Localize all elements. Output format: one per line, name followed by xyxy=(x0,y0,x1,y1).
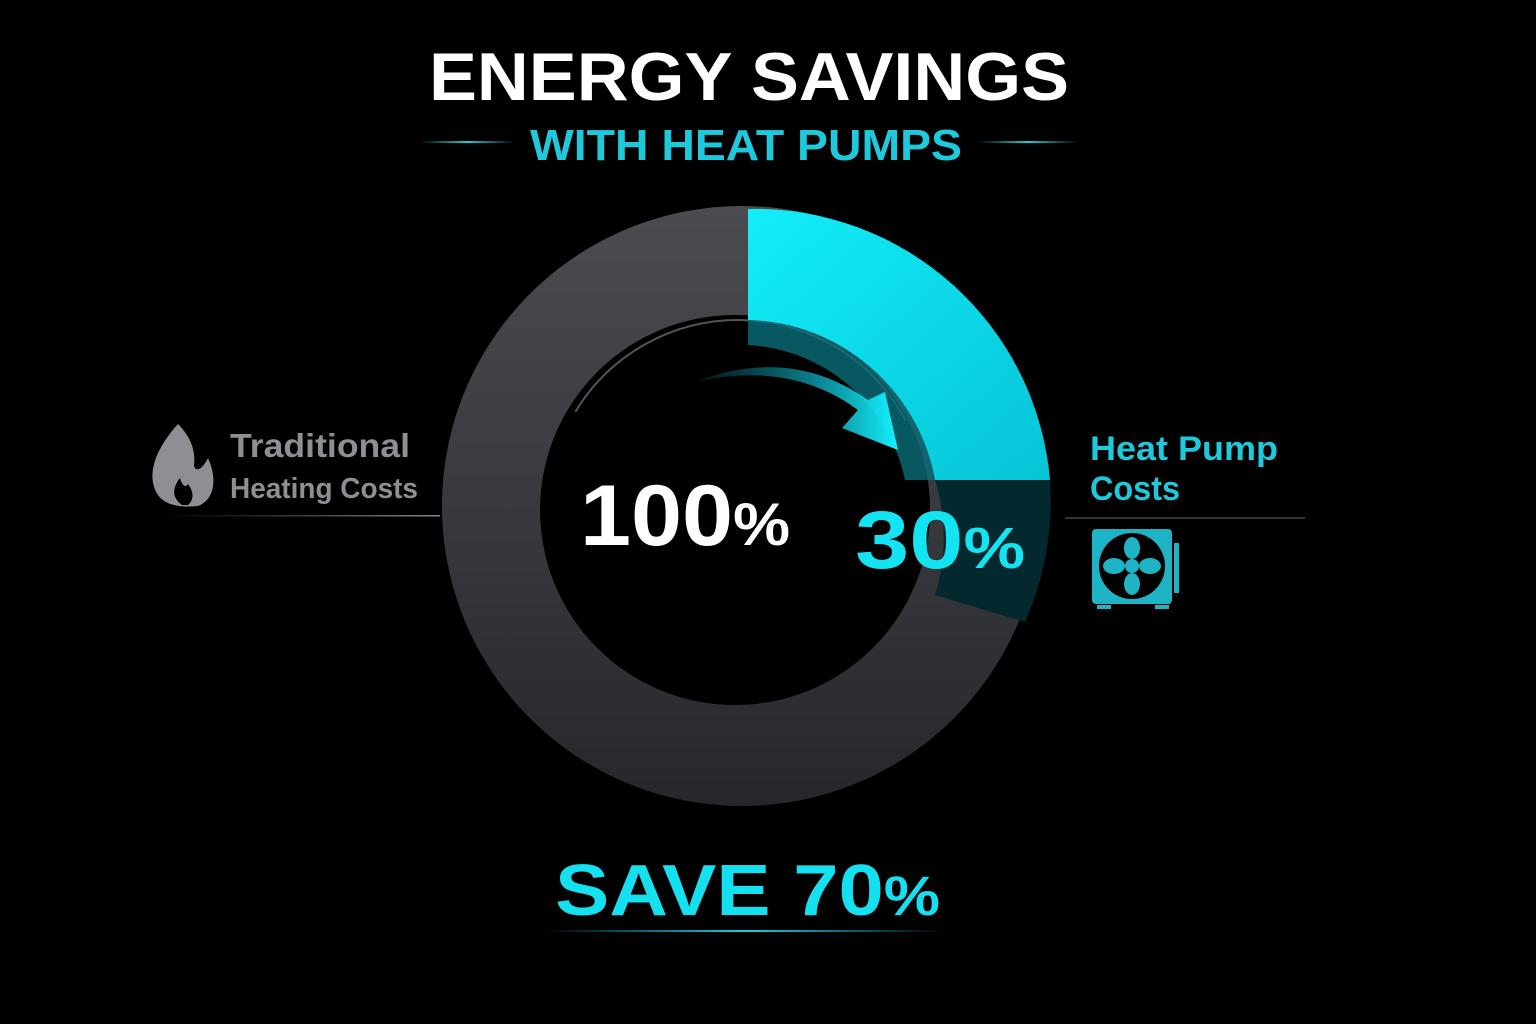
icon: heat pump unit xyxy=(1092,529,1179,609)
donut chart xyxy=(442,206,1051,806)
arrow xyxy=(695,367,898,450)
icon: flame xyxy=(153,424,213,507)
label: heat pump costs: Heat Pump xyxy=(1090,430,1278,468)
value: 30%: 30 % xyxy=(855,495,1025,586)
label: traditional heating costs: Traditional xyxy=(230,427,410,464)
segment: dark teal xyxy=(935,480,1051,622)
title: ENERGY SAVINGS xyxy=(429,39,1069,115)
subtitle: WITH HEAT PUMPS xyxy=(530,121,962,170)
label: traditional heating costs: Heating Costs xyxy=(230,473,418,505)
label: heat pump costs xyxy=(1065,430,1305,609)
segment: heat pump 30% xyxy=(748,209,1050,480)
label: heat pump costs: Costs xyxy=(1090,470,1180,508)
ring: traditional xyxy=(442,206,1042,806)
value: 100%: 100% xyxy=(580,468,790,564)
label: traditional heating costs xyxy=(153,424,440,516)
callout: save 70%: SAVE 70 % xyxy=(555,851,940,931)
